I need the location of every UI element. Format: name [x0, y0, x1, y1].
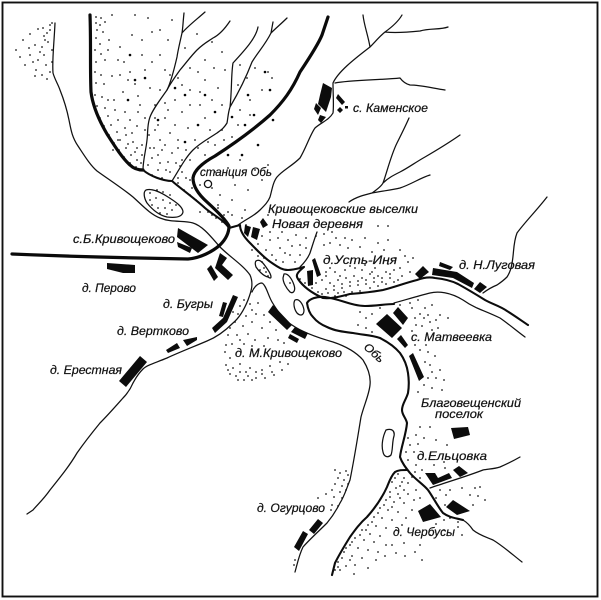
label: Matveevka: с. Матвеевка	[411, 332, 492, 344]
M. Krivoshchekovo bank and lower west bank	[252, 283, 370, 572]
label: N. Lugovaya: д. Н.Луговая	[459, 260, 535, 272]
Eltsovka buildings	[425, 466, 468, 485]
label: Ogurtsovo: д. Огурцово	[257, 503, 326, 515]
label: Cherbusy: д. Чербусы	[393, 527, 456, 539]
label: Perovo: д. Перово	[82, 283, 137, 295]
Ust-Inya buildings	[307, 258, 321, 286]
B. Krivoshchekovo buildings	[177, 228, 208, 253]
left bank of the Ob	[27, 23, 252, 514]
N. Lugovaya buildings	[415, 262, 487, 293]
label: Erestnaya: д. Ерестная	[50, 365, 122, 377]
Novaya derevnya buildings	[244, 218, 268, 240]
Bugry north buildings	[207, 253, 233, 281]
Vertkovo buildings	[166, 337, 197, 353]
label: Bugry: д. Бугры	[163, 299, 214, 311]
station Ob marker	[204, 180, 212, 188]
label: Kamenskoe: с. Каменское	[353, 103, 428, 115]
heavy west bank and channels	[90, 15, 143, 170]
label: Ust-Inya: д.Усть-Иня	[323, 255, 397, 267]
label: Blagoveshchensky: Благовещенский	[421, 398, 522, 410]
label: Ob river: Обь	[361, 341, 386, 366]
Cherbusy bank	[332, 470, 407, 575]
label: Novaya derevnya: Новая деревня	[272, 219, 363, 231]
Matveevka buildings	[376, 307, 424, 381]
Ust-Inya stream	[300, 232, 317, 267]
tributary one	[143, 12, 205, 170]
tributary two	[167, 21, 230, 90]
label: settlement: поселок	[435, 409, 484, 421]
Inya river north bank	[229, 225, 528, 325]
tributary three	[172, 18, 287, 181]
settlement markers	[107, 83, 487, 551]
islands	[144, 189, 394, 457]
Ogurtsovo buildings	[294, 519, 323, 551]
N. Lugovaya stream	[483, 197, 547, 293]
Kamenskoe buildings	[314, 83, 348, 123]
label: station Ob: станция Обь	[200, 167, 272, 179]
Perovo buildings	[107, 263, 135, 273]
stippled terrain	[16, 15, 485, 574]
east side streams	[349, 118, 460, 202]
Kamenskoe stream	[238, 15, 448, 225]
M. Krivoshchekovo buildings	[268, 305, 308, 343]
label: B. Krivoshchekovo: с.Б.Кривощеково	[73, 234, 176, 246]
label: M. Krivoshchekovo: д. М.Кривощеково	[235, 348, 343, 360]
Inya river south bank and Ob east bank	[307, 297, 463, 520]
Blagoveshchensky building	[451, 427, 470, 439]
Erestnaya building	[119, 356, 147, 387]
label: Eltsovka: д.Ельцовка	[417, 451, 487, 463]
label: Krivoshchekovskie vyselki: Кривощековские выселки	[268, 204, 419, 216]
place labels	[50, 103, 535, 539]
label: Vertkovo: д. Вертково	[117, 326, 190, 338]
Eltsovka stream	[430, 457, 520, 488]
Bugry buildings	[212, 295, 238, 333]
Cherbusy buildings	[418, 500, 470, 522]
railway line	[12, 17, 328, 259]
